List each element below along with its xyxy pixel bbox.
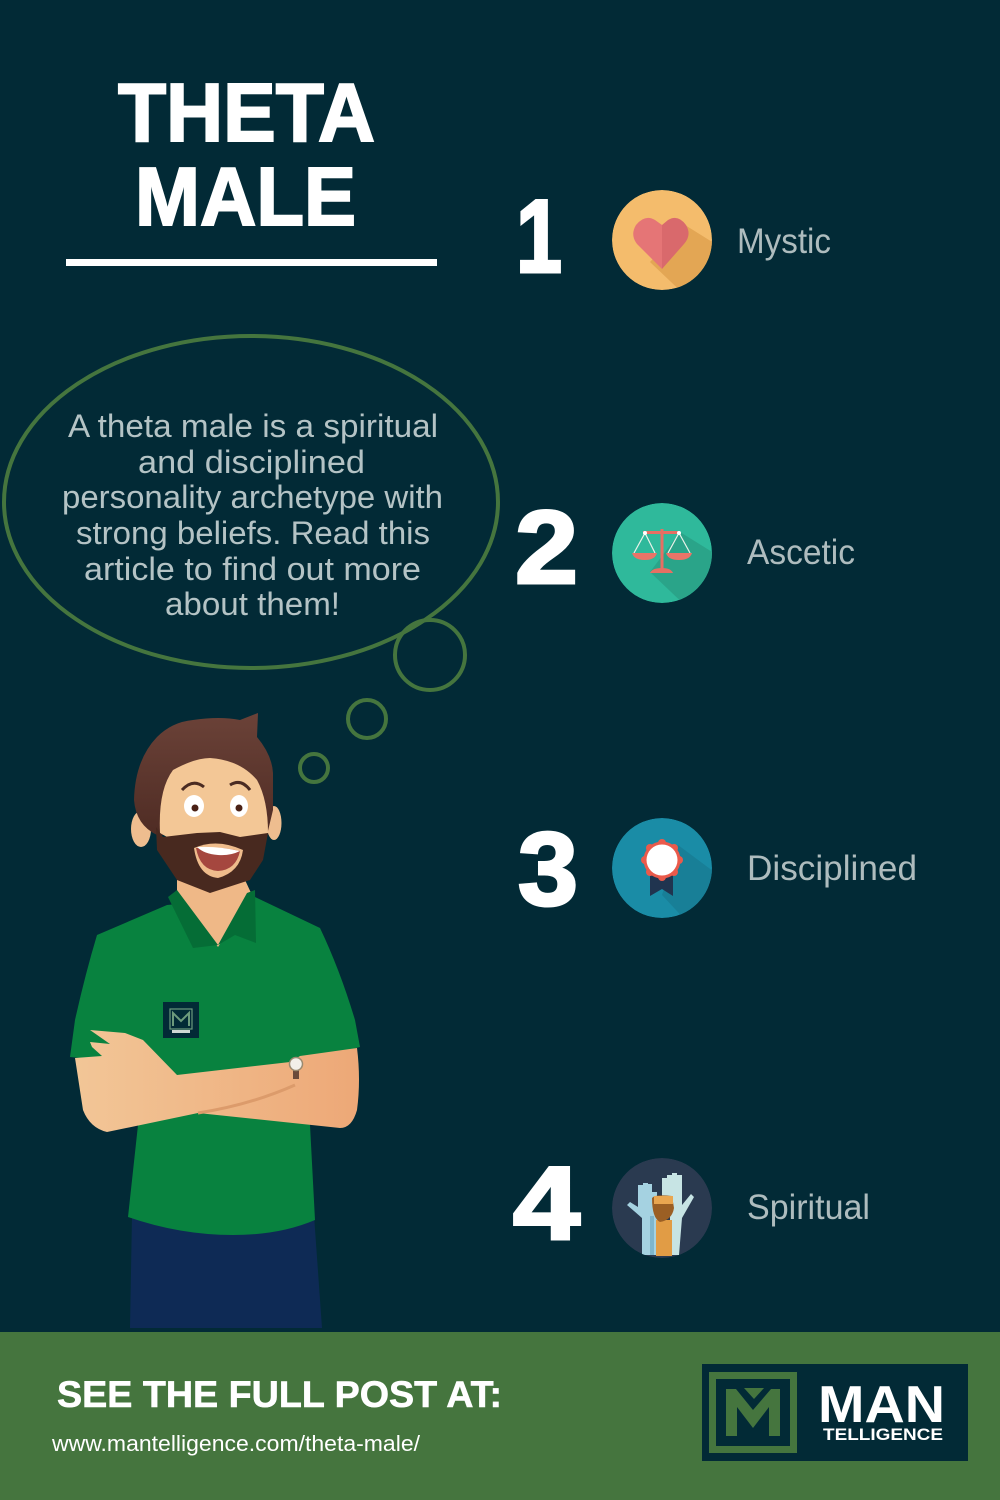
pupils bbox=[192, 804, 242, 812]
title underline bbox=[66, 259, 437, 266]
neck bbox=[177, 880, 252, 947]
logo wordmark: MAN bbox=[818, 1376, 945, 1434]
bubble text: and disciplined bbox=[138, 444, 365, 480]
label: Disciplined: Disciplined bbox=[747, 849, 917, 888]
shirt bbox=[70, 897, 360, 1235]
bubble text: strong beliefs. Read this bbox=[76, 515, 430, 551]
footer heading: SEE THE FULL POST AT: bbox=[57, 1374, 502, 1415]
icon: ribbon bbox=[612, 818, 712, 918]
label: Mystic: Mystic bbox=[737, 222, 831, 261]
icon: scales bbox=[612, 503, 712, 603]
icon: heart bbox=[612, 190, 712, 290]
beard bbox=[156, 827, 268, 893]
footer url: www.mantelligence.com/theta-male/ bbox=[51, 1431, 421, 1456]
watch bbox=[290, 1058, 302, 1079]
eyebrows bbox=[182, 782, 250, 790]
face bbox=[160, 758, 268, 850]
ears bbox=[131, 811, 151, 847]
shirt badge bbox=[163, 1002, 199, 1038]
number 3: 3 bbox=[518, 812, 578, 928]
number 4: 4 bbox=[513, 1146, 580, 1262]
pants bbox=[130, 1215, 322, 1328]
arms bbox=[75, 1030, 359, 1132]
bubble text: personality archetype with bbox=[62, 479, 443, 515]
eyes bbox=[184, 795, 248, 817]
logo mark bbox=[712, 1376, 794, 1450]
bubble text: A theta male is a spiritual bbox=[68, 408, 438, 444]
hair bbox=[134, 713, 273, 835]
character: man with crossed arms bbox=[70, 713, 360, 1328]
arm crease bbox=[198, 1085, 295, 1113]
bubble text: about them! bbox=[165, 586, 340, 622]
mouth skin bbox=[194, 843, 243, 878]
number 1: 1 bbox=[516, 179, 562, 295]
icon: raised hands bbox=[612, 1158, 712, 1258]
footer band bbox=[0, 1332, 1000, 1500]
label: Spiritual: Spiritual bbox=[747, 1188, 870, 1227]
logo wordmark: TELLIGENCE bbox=[823, 1425, 943, 1444]
collar bbox=[168, 890, 256, 948]
title: THETA bbox=[118, 66, 375, 159]
bubble text bbox=[62, 408, 443, 622]
logo bbox=[702, 1364, 968, 1461]
label: Ascetic: Ascetic bbox=[747, 533, 855, 572]
teeth bbox=[197, 847, 240, 855]
thought bubble bbox=[4, 336, 498, 782]
number 2: 2 bbox=[515, 490, 578, 606]
title bbox=[118, 66, 375, 243]
mouth bbox=[196, 847, 240, 871]
bubble text: article to find out more bbox=[84, 551, 421, 587]
title: MALE bbox=[135, 150, 356, 243]
